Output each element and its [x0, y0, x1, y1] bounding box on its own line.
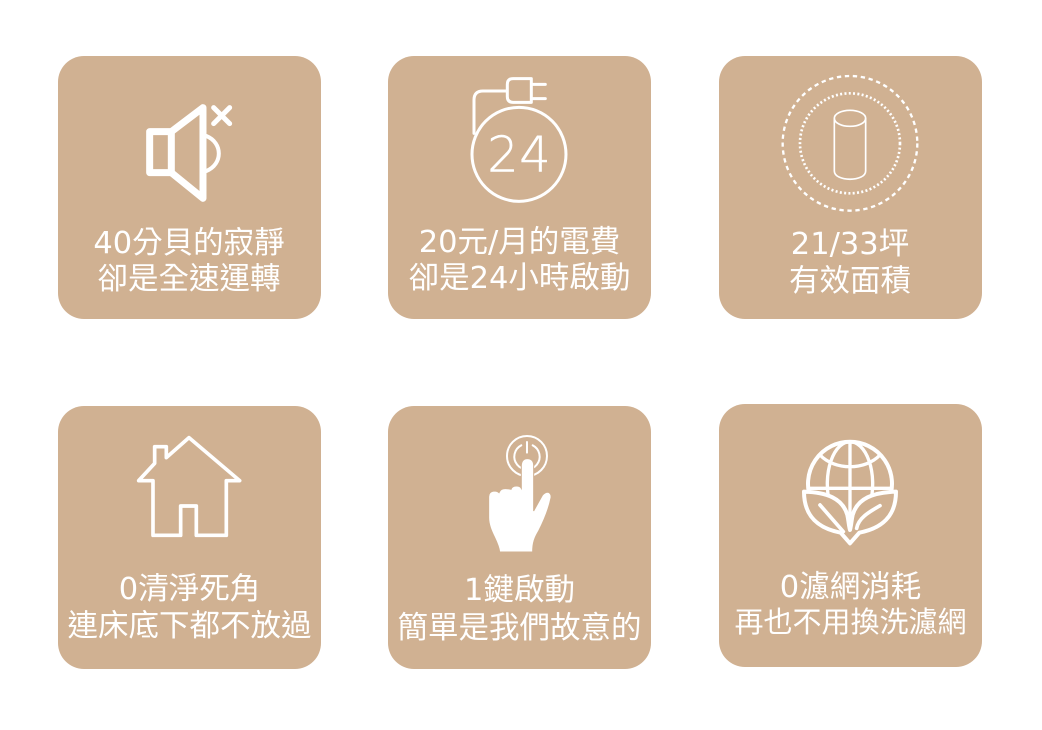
- text: area caption: 21/33坪: [791, 227, 909, 262]
- text: silent caption: 40分貝的寂靜: [93, 226, 285, 261]
- panel: no dead corners: [58, 406, 321, 669]
- icon: hand pressing power button: [489, 436, 551, 552]
- text: one-touch caption: 1鍵啟動: [464, 573, 575, 608]
- text: silent caption: 卻是全速運轉: [98, 262, 280, 297]
- text: electricity caption: 卻是24小時啟動: [409, 261, 630, 296]
- text: filter caption: [734, 570, 967, 639]
- text: corners caption: [68, 572, 312, 644]
- panel: one-touch start: [388, 406, 651, 669]
- text: electricity caption: [409, 225, 630, 296]
- icon: plug and 24 clock: [472, 79, 566, 201]
- text: filter caption: 0濾網消耗: [780, 570, 921, 605]
- text: area caption: [789, 227, 911, 299]
- icon: purifier with dotted coverage rings: [783, 76, 917, 211]
- panel: effective area: [719, 56, 982, 319]
- text: filter caption: 再也不用換洗濾網: [734, 605, 967, 639]
- icon: plug and 24 clock: 24: [487, 126, 551, 184]
- text: electricity caption: 20元/月的電費: [419, 225, 620, 260]
- icon: house: [139, 438, 240, 535]
- icon: globe with leaves: [804, 442, 896, 543]
- text: corners caption: 連床底下都不放過: [68, 609, 312, 644]
- panel: electricity cost: [388, 56, 651, 319]
- panel: no filter consumption: [719, 404, 982, 667]
- text: one-touch caption: 簡單是我們故意的: [398, 611, 642, 646]
- text: silent caption: [93, 226, 285, 297]
- text: area caption: 有效面積: [789, 264, 911, 299]
- panel: silent operation: [58, 56, 321, 319]
- icon: muted speaker: [150, 108, 230, 198]
- text: corners caption: 0清淨死角: [119, 572, 260, 607]
- text: one-touch caption: [398, 573, 642, 646]
